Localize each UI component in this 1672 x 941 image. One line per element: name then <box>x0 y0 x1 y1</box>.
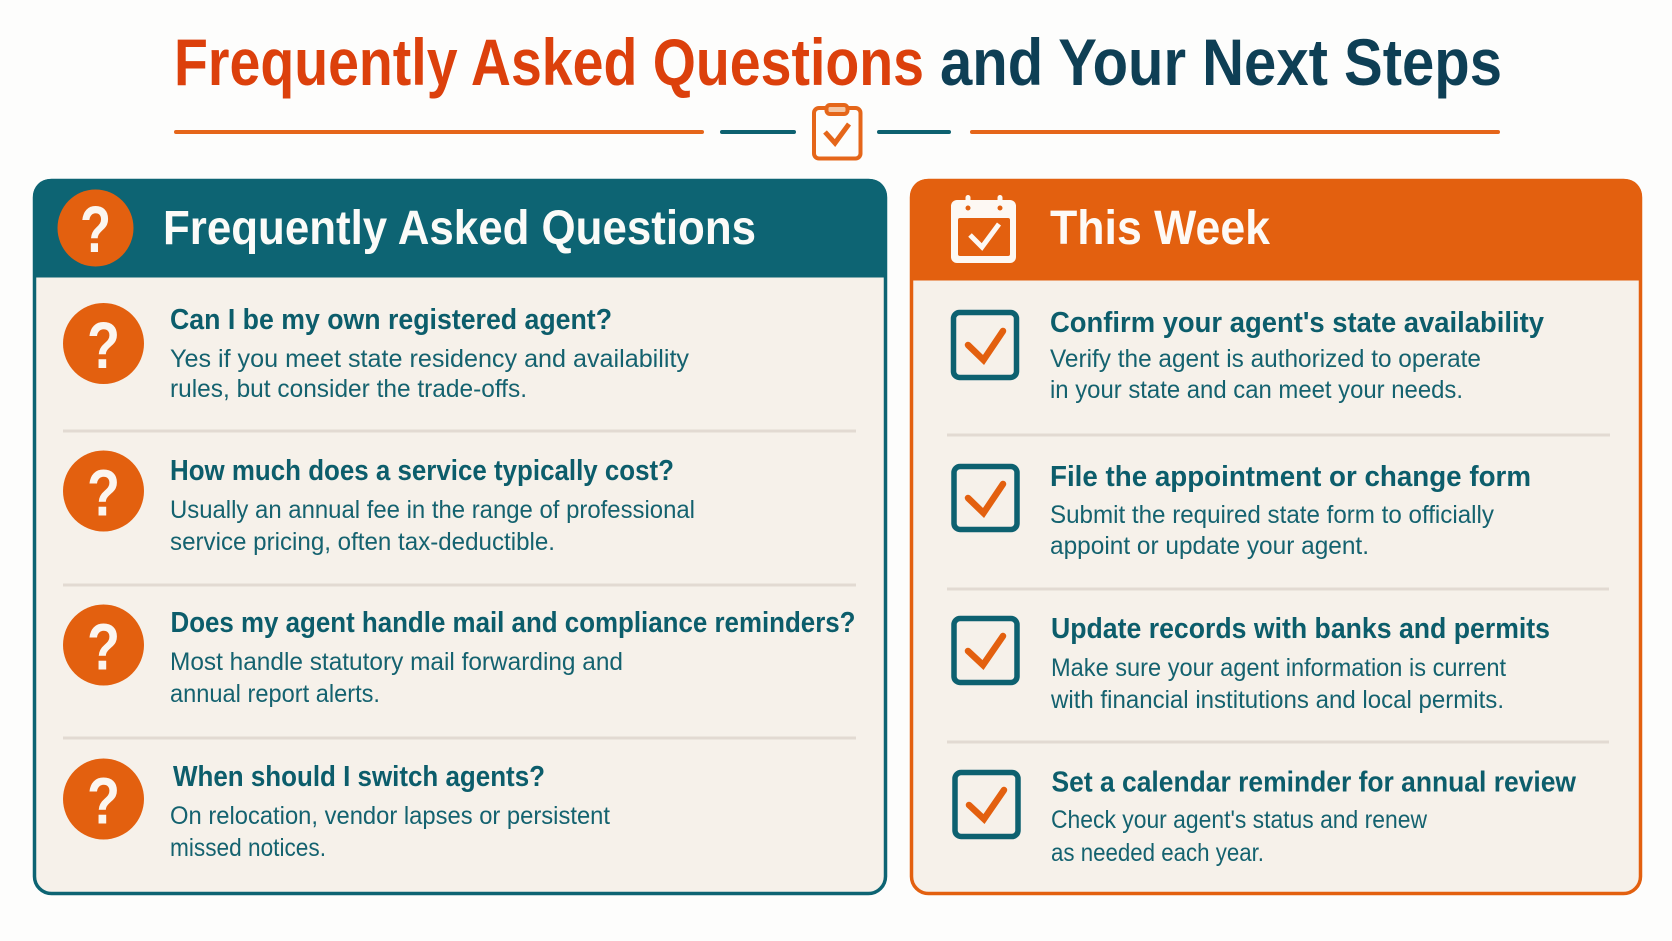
faq item 4: On relocation, vendor lapses or persistent <box>170 802 610 830</box>
step 4: as needed each year. <box>1051 839 1264 867</box>
panel heading: This Week <box>1050 202 1270 255</box>
step 3 <box>954 613 1550 714</box>
panel header <box>33 179 887 278</box>
faq item 4: missed notices. <box>170 834 326 862</box>
icon: question circle: ? <box>80 192 111 266</box>
step 1 <box>954 307 1544 404</box>
faq item 1: ? <box>87 308 120 382</box>
title <box>174 25 1502 99</box>
faq item 2: service pricing, often tax-deductible. <box>170 528 555 556</box>
faq item 1: Yes if you meet state residency and availability <box>170 345 689 373</box>
faq item 2: How much does a service typically cost? <box>170 455 674 487</box>
step 2 <box>954 461 1531 560</box>
panel: this week <box>910 179 1642 894</box>
icon: clipboard <box>814 105 860 158</box>
step 1: in your state and can meet your needs. <box>1050 376 1463 404</box>
faq item 2: Usually an annual fee in the range of professional <box>170 496 695 524</box>
step 4: Set a calendar reminder for annual review <box>1052 766 1577 798</box>
step 1: Verify the agent is authorized to operate <box>1050 345 1481 373</box>
faq item 1 <box>63 303 689 403</box>
faq item 3: Does my agent handle mail and compliance reminders? <box>170 607 856 639</box>
faq item 4: When should I switch agents? <box>173 761 545 793</box>
faq item 3: Most handle statutory mail forwarding and <box>170 648 623 676</box>
faq item 3 <box>63 604 856 708</box>
faq item 4 <box>63 758 610 862</box>
faq item 3: ? <box>87 610 120 684</box>
panel heading: Frequently Asked Questions <box>163 202 756 255</box>
title: Frequently Asked Questions <box>174 25 924 99</box>
faq item 2: ? <box>87 456 120 530</box>
step 2: File the appointment or change form <box>1050 461 1531 493</box>
step 3: Update records with banks and permits <box>1051 613 1550 645</box>
title: and Your Next Steps <box>940 25 1502 99</box>
panel header <box>910 179 1642 280</box>
panel: frequently asked questions <box>33 179 887 894</box>
step 4: Check your agent's status and renew <box>1051 806 1428 834</box>
faq item 2 <box>63 450 695 556</box>
step 3: with financial institutions and local permits. <box>1050 686 1504 714</box>
icon: question circle <box>58 190 134 266</box>
faq item 1: rules, but consider the trade-offs. <box>170 375 527 403</box>
step 1: Confirm your agent's state availability <box>1050 307 1544 339</box>
step 4 <box>955 766 1577 867</box>
faq item 3: annual report alerts. <box>170 680 380 708</box>
faq item 1: Can I be my own registered agent? <box>170 304 612 336</box>
step 3: Make sure your agent information is current <box>1051 654 1506 682</box>
faq item 4: ? <box>87 764 120 838</box>
step 2: Submit the required state form to officially <box>1050 501 1494 529</box>
step 2: appoint or update your agent. <box>1050 532 1369 560</box>
icon: calendar <box>951 195 1016 263</box>
title divider with clipboard <box>174 105 1500 158</box>
